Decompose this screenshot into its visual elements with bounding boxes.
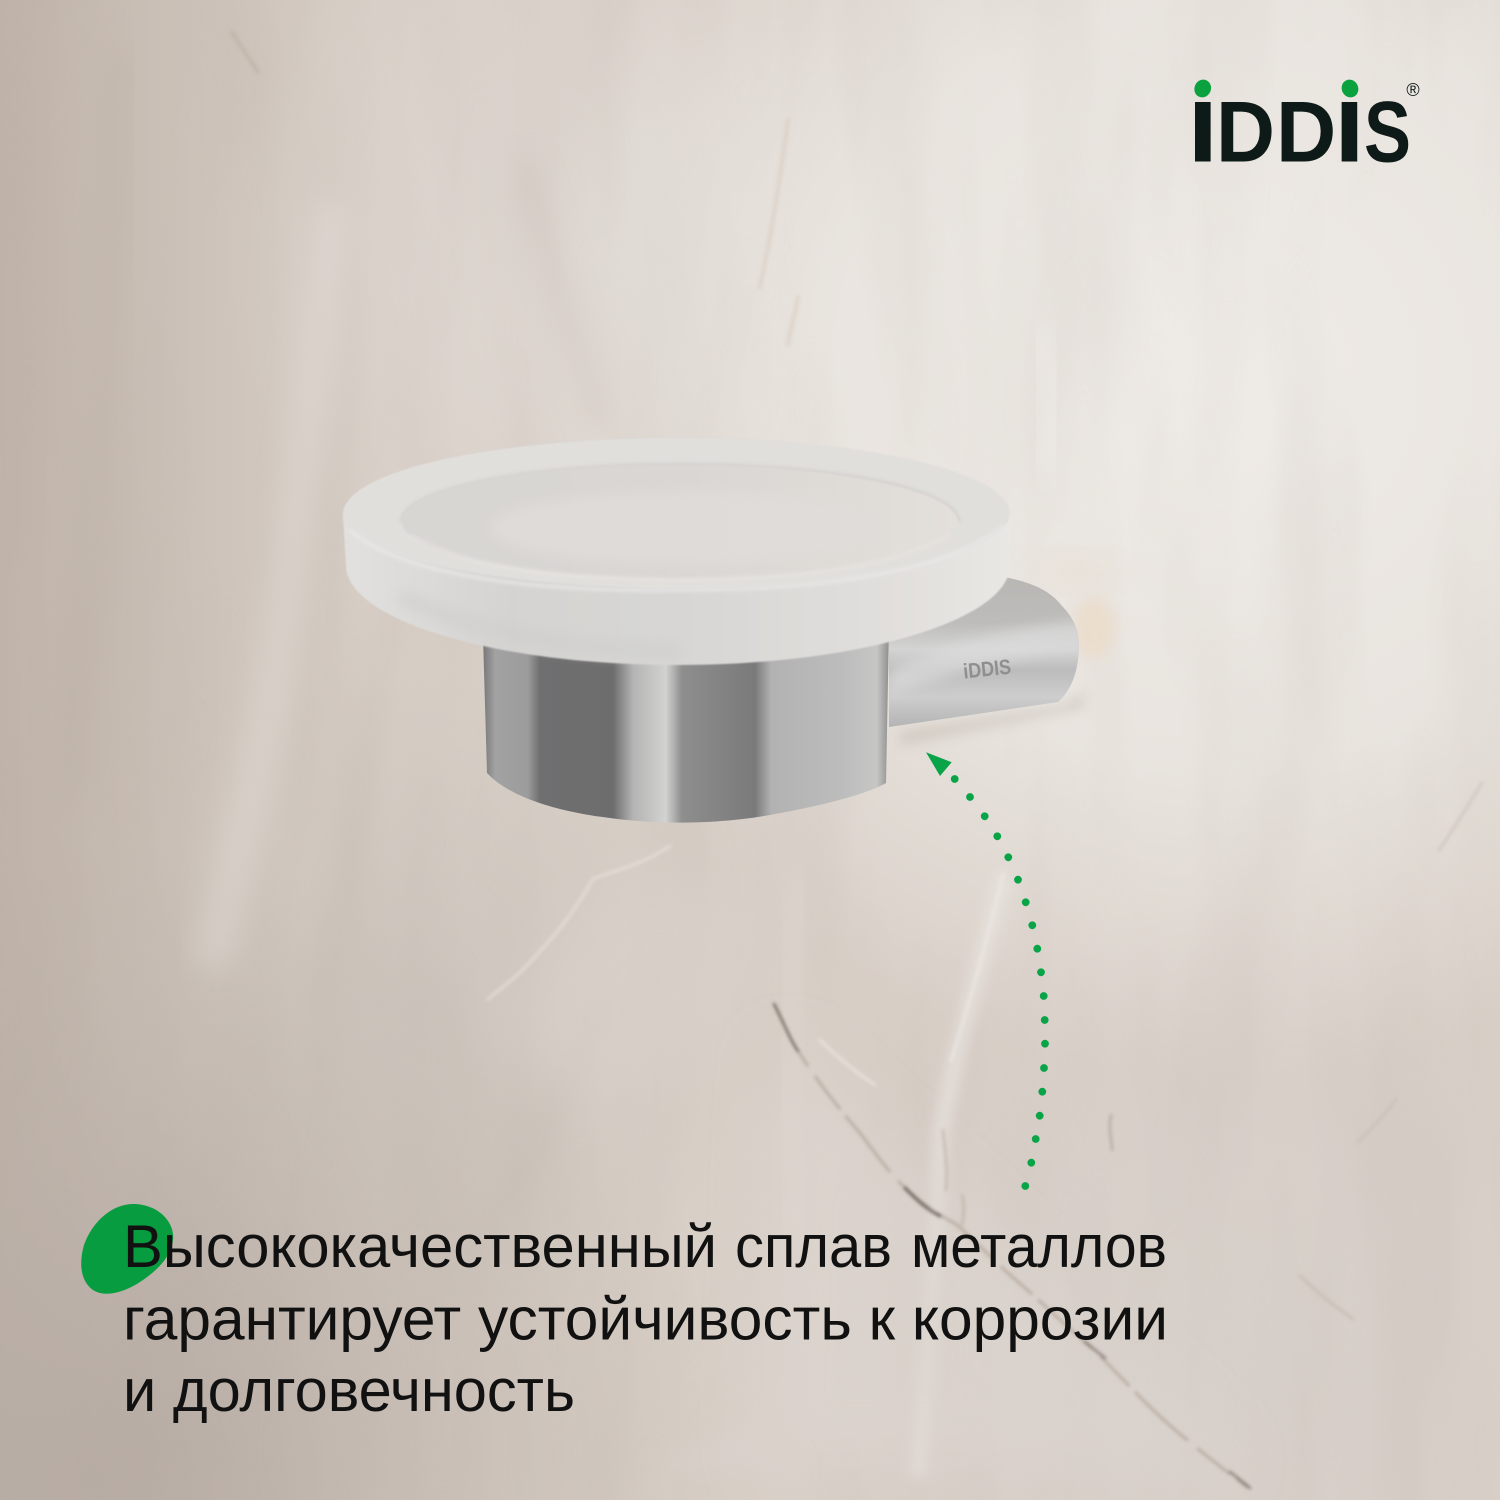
arrow dots xyxy=(951,775,1049,1190)
lighter patches beside the veins xyxy=(495,870,780,1100)
caption text xyxy=(123,1213,1168,1424)
logo letters: D xyxy=(1276,84,1336,180)
logo letters: I xyxy=(1188,83,1218,180)
marble texture xyxy=(1064,295,1070,320)
caption text: металлов xyxy=(911,1213,1167,1280)
logo letters xyxy=(1188,83,1411,180)
soft broad streaks xyxy=(201,400,1004,1474)
arrow head xyxy=(926,752,952,776)
wall shadow and glow xyxy=(900,556,1115,745)
registered mark: ® xyxy=(1406,80,1420,100)
metal cup xyxy=(483,628,889,823)
caption text: сплав xyxy=(735,1213,892,1280)
engraved logo: iDDIS xyxy=(962,656,1012,683)
logo green dots xyxy=(1191,77,1361,100)
caption text: и долговечность xyxy=(123,1357,575,1424)
caption text: гарантирует устойчивость к коррозии xyxy=(123,1286,1168,1352)
green blob accent xyxy=(81,1204,173,1294)
caption text: Высококачественный xyxy=(123,1213,717,1280)
wall arm xyxy=(889,577,1085,727)
logo: IDDIS xyxy=(1188,77,1420,180)
product: soap dish xyxy=(343,438,1115,823)
logo letters: S xyxy=(1364,84,1411,180)
logo letters: D xyxy=(1216,84,1275,180)
arrow: dotted curve pointing at the arm xyxy=(926,752,1049,1190)
frosted glass plate xyxy=(343,438,1011,665)
logo letters: I xyxy=(1334,83,1365,180)
